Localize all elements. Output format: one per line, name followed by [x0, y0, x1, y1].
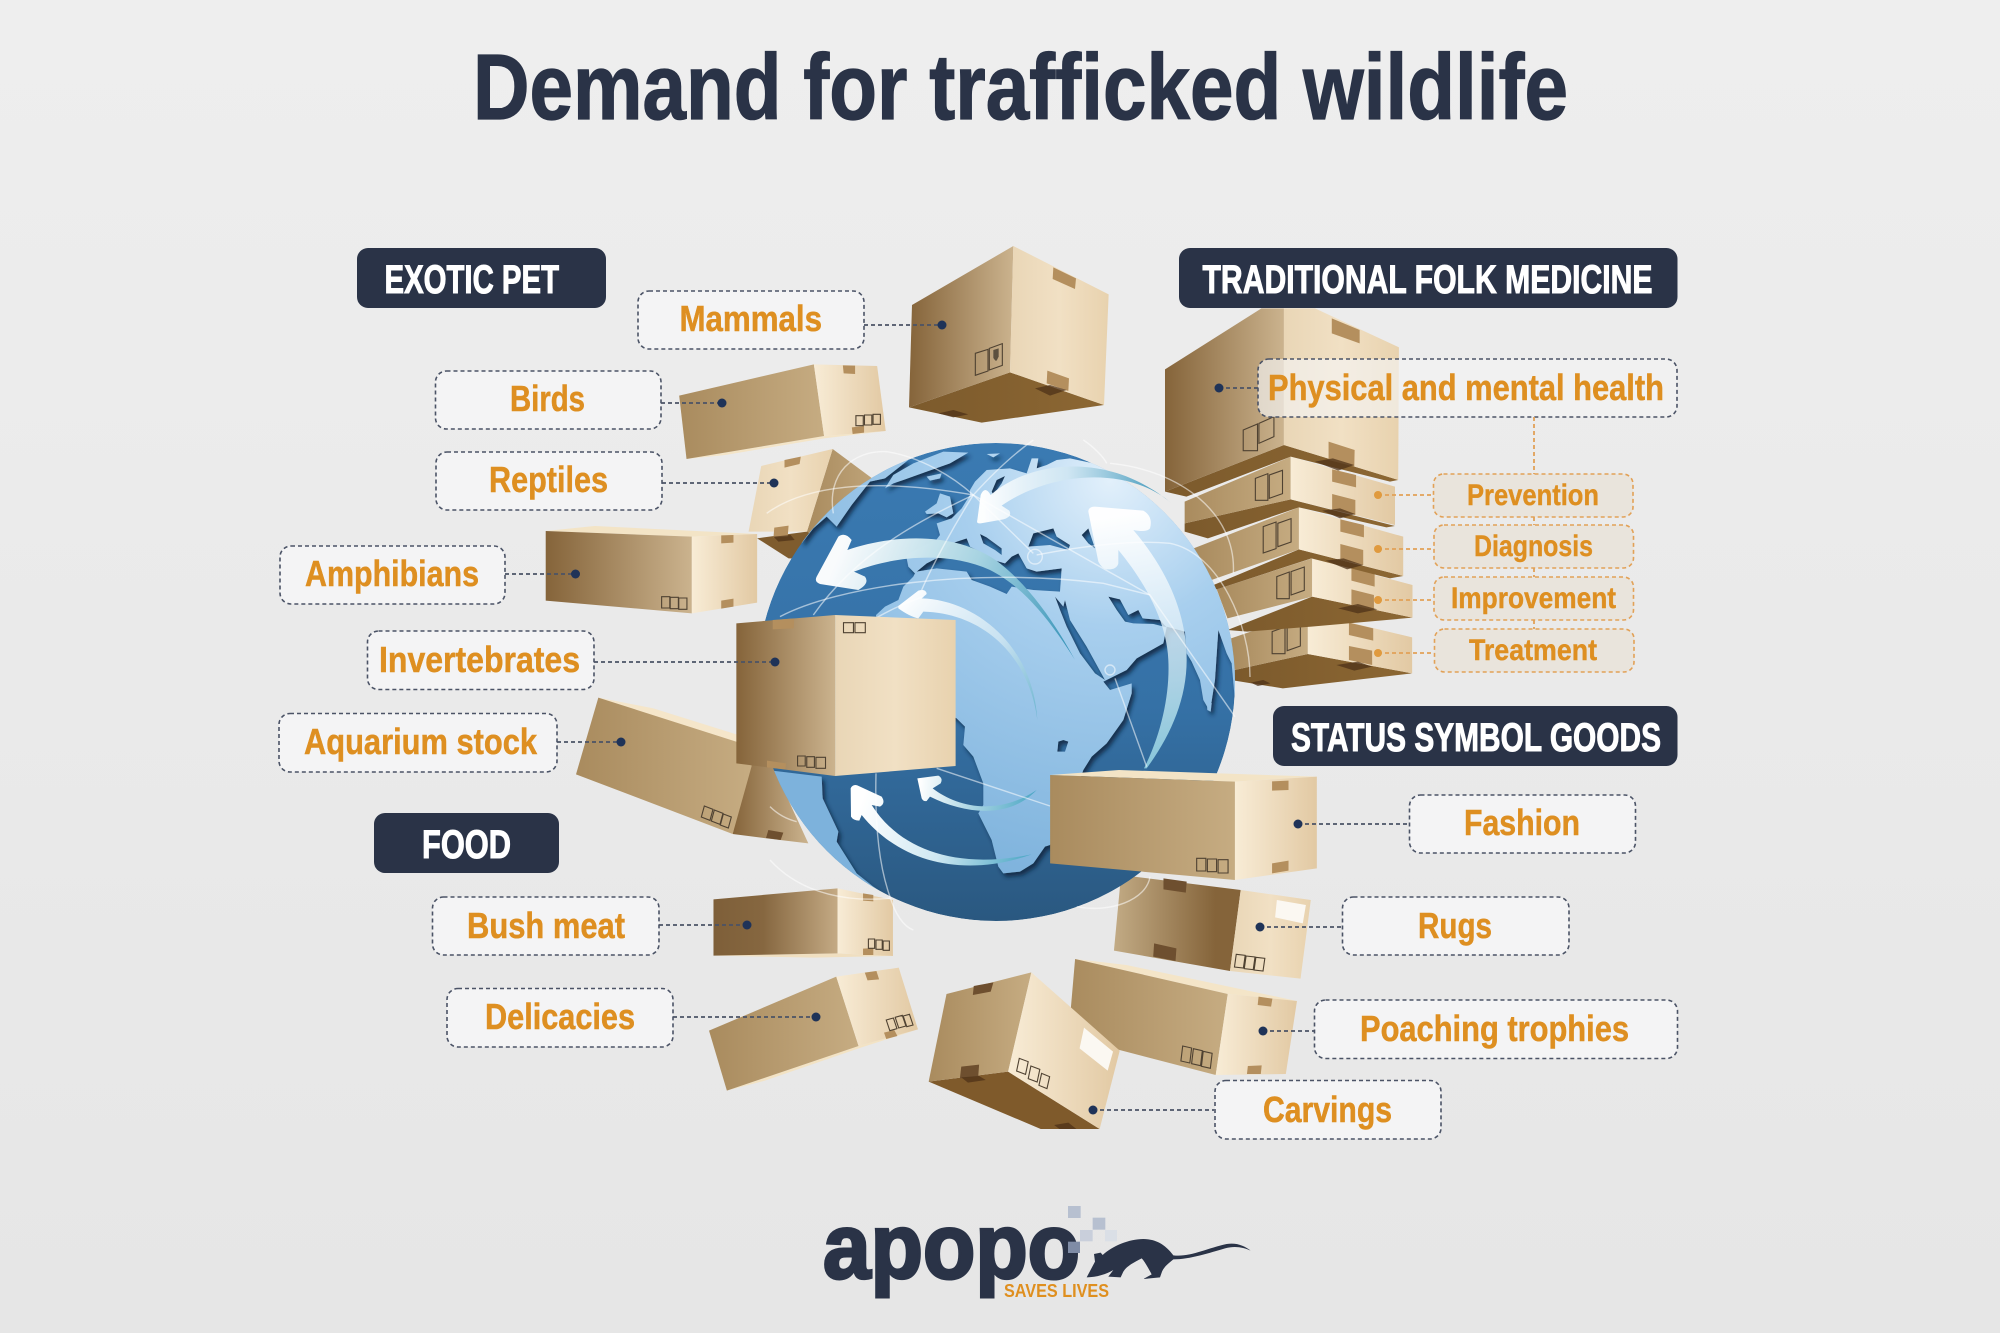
connector: amphibians: [505, 570, 580, 578]
label: diagnosis: [1434, 525, 1634, 568]
label: improvement: [1434, 577, 1634, 620]
label: carvings: [1215, 1080, 1441, 1139]
box: bush meat: [713, 888, 893, 958]
connector: fashion: [1294, 820, 1409, 828]
globe: [753, 440, 1270, 940]
globe sphere and land: [765, 443, 1235, 921]
header: traditional folk medicine: TRADITIONAL FOLK MEDICINE: [1202, 258, 1652, 302]
connector: diagnosis: [1374, 545, 1434, 553]
label: rugs: [1342, 897, 1569, 955]
label: bush meat: Bush meat: [467, 905, 625, 946]
label: amphibians: Amphibians: [305, 553, 479, 594]
logo wordmark: apopo: [823, 1196, 1080, 1298]
header: traditional folk medicine: [1179, 248, 1678, 308]
label: diagnosis: Diagnosis: [1474, 530, 1593, 563]
header: food: FOOD: [422, 823, 511, 867]
label: invertebrates: [368, 631, 594, 690]
connector: mammals: [864, 320, 946, 330]
connector: treatment: [1374, 649, 1434, 657]
logo rat: [1087, 1239, 1251, 1279]
connector: bush meat: [659, 920, 752, 930]
label: reptiles: [436, 452, 662, 510]
header: food: [374, 813, 559, 873]
logo pixel squares: [1068, 1206, 1117, 1253]
label: treatment: [1434, 629, 1634, 672]
label: delicacies: [447, 988, 673, 1047]
box: delicacies: [709, 968, 918, 1091]
connector: delicacies: [673, 1012, 820, 1022]
label: rugs: Rugs: [1418, 905, 1492, 946]
label: improvement: Improvement: [1451, 582, 1616, 615]
box: stack level 4: [1217, 558, 1412, 632]
connector: carvings: [1088, 1106, 1214, 1114]
label: poaching trophies: Poaching trophies: [1360, 1008, 1629, 1049]
header: status symbol goods: [1273, 706, 1678, 766]
network lines: [767, 440, 1250, 930]
connector: poaching trophies: [1258, 1026, 1314, 1036]
box: poaching trophies: [1068, 959, 1297, 1075]
box: fashion: [1050, 770, 1317, 880]
arrow: lower small: [917, 776, 1037, 811]
label: mammals: [638, 291, 864, 349]
box: stack level 5: [1231, 612, 1412, 688]
box: aquarium stock: [576, 698, 808, 843]
header: status symbol goods: STATUS SYMBOL GOODS: [1291, 716, 1661, 760]
box: invertebrates: [736, 615, 956, 776]
connector: invertebrates: [594, 658, 780, 666]
box: birds: [679, 364, 886, 459]
label: treatment: Treatment: [1469, 634, 1597, 667]
label: mammals: Mammals: [680, 298, 822, 339]
label: aquarium stock: [279, 714, 557, 772]
label: amphibians: [280, 546, 505, 604]
arrow: left large: [816, 535, 1075, 660]
label: invertebrates: Invertebrates: [379, 639, 580, 680]
arrow: lower large: [851, 785, 1032, 866]
box: carvings: [929, 972, 1120, 1129]
label: reptiles: Reptiles: [489, 459, 608, 500]
label: poaching trophies: [1314, 1000, 1678, 1058]
connector: birds: [661, 398, 726, 408]
logo tagline: SAVES LIVES: [1004, 1281, 1109, 1301]
box: amphibians: [546, 526, 757, 613]
header: exotic pet: [357, 248, 606, 308]
logo: apopo saves lives: [823, 1196, 1251, 1301]
title: Demand for trafficked wildlife: [473, 35, 1568, 139]
connector: aquarium stock: [557, 738, 626, 746]
box: rugs: [1114, 875, 1311, 979]
label: fashion: [1410, 795, 1636, 853]
connector: improvement: [1374, 596, 1434, 604]
label: physical and mental health: [1258, 359, 1677, 417]
land masses: [774, 452, 1235, 896]
box: reptiles: [749, 449, 897, 560]
label: bush meat: [432, 897, 659, 955]
label: birds: [436, 371, 661, 429]
arrow: right large: [1088, 507, 1187, 768]
globe arrows: [816, 467, 1187, 866]
connector: prevention: [1374, 491, 1434, 499]
arrow: top: [977, 467, 1172, 523]
box: mammals: [909, 246, 1109, 423]
label: birds: Birds: [510, 378, 585, 419]
label: physical and mental health: Physical and mental health: [1268, 367, 1664, 408]
connector: rugs: [1256, 922, 1342, 932]
vertical links between health sub-labels: [1533, 417, 1535, 629]
label: prevention: [1434, 474, 1633, 517]
label: fashion: Fashion: [1464, 802, 1580, 843]
box: stack level 2: [1185, 457, 1395, 538]
arrow: left thin: [898, 590, 1037, 720]
connector: reptiles: [662, 478, 778, 488]
box: stack level 3: [1194, 507, 1403, 589]
label: delicacies: Delicacies: [485, 996, 635, 1037]
box stack: traditional folk medicine: [1165, 308, 1412, 688]
box: stack level 1 (top): [1165, 308, 1399, 497]
connector: physical and mental health: [1214, 384, 1258, 392]
label: aquarium stock: Aquarium stock: [304, 721, 538, 762]
label: prevention: Prevention: [1467, 479, 1599, 512]
header: exotic pet: EXOTIC PET: [384, 258, 559, 302]
label: carvings: Carvings: [1263, 1089, 1392, 1130]
